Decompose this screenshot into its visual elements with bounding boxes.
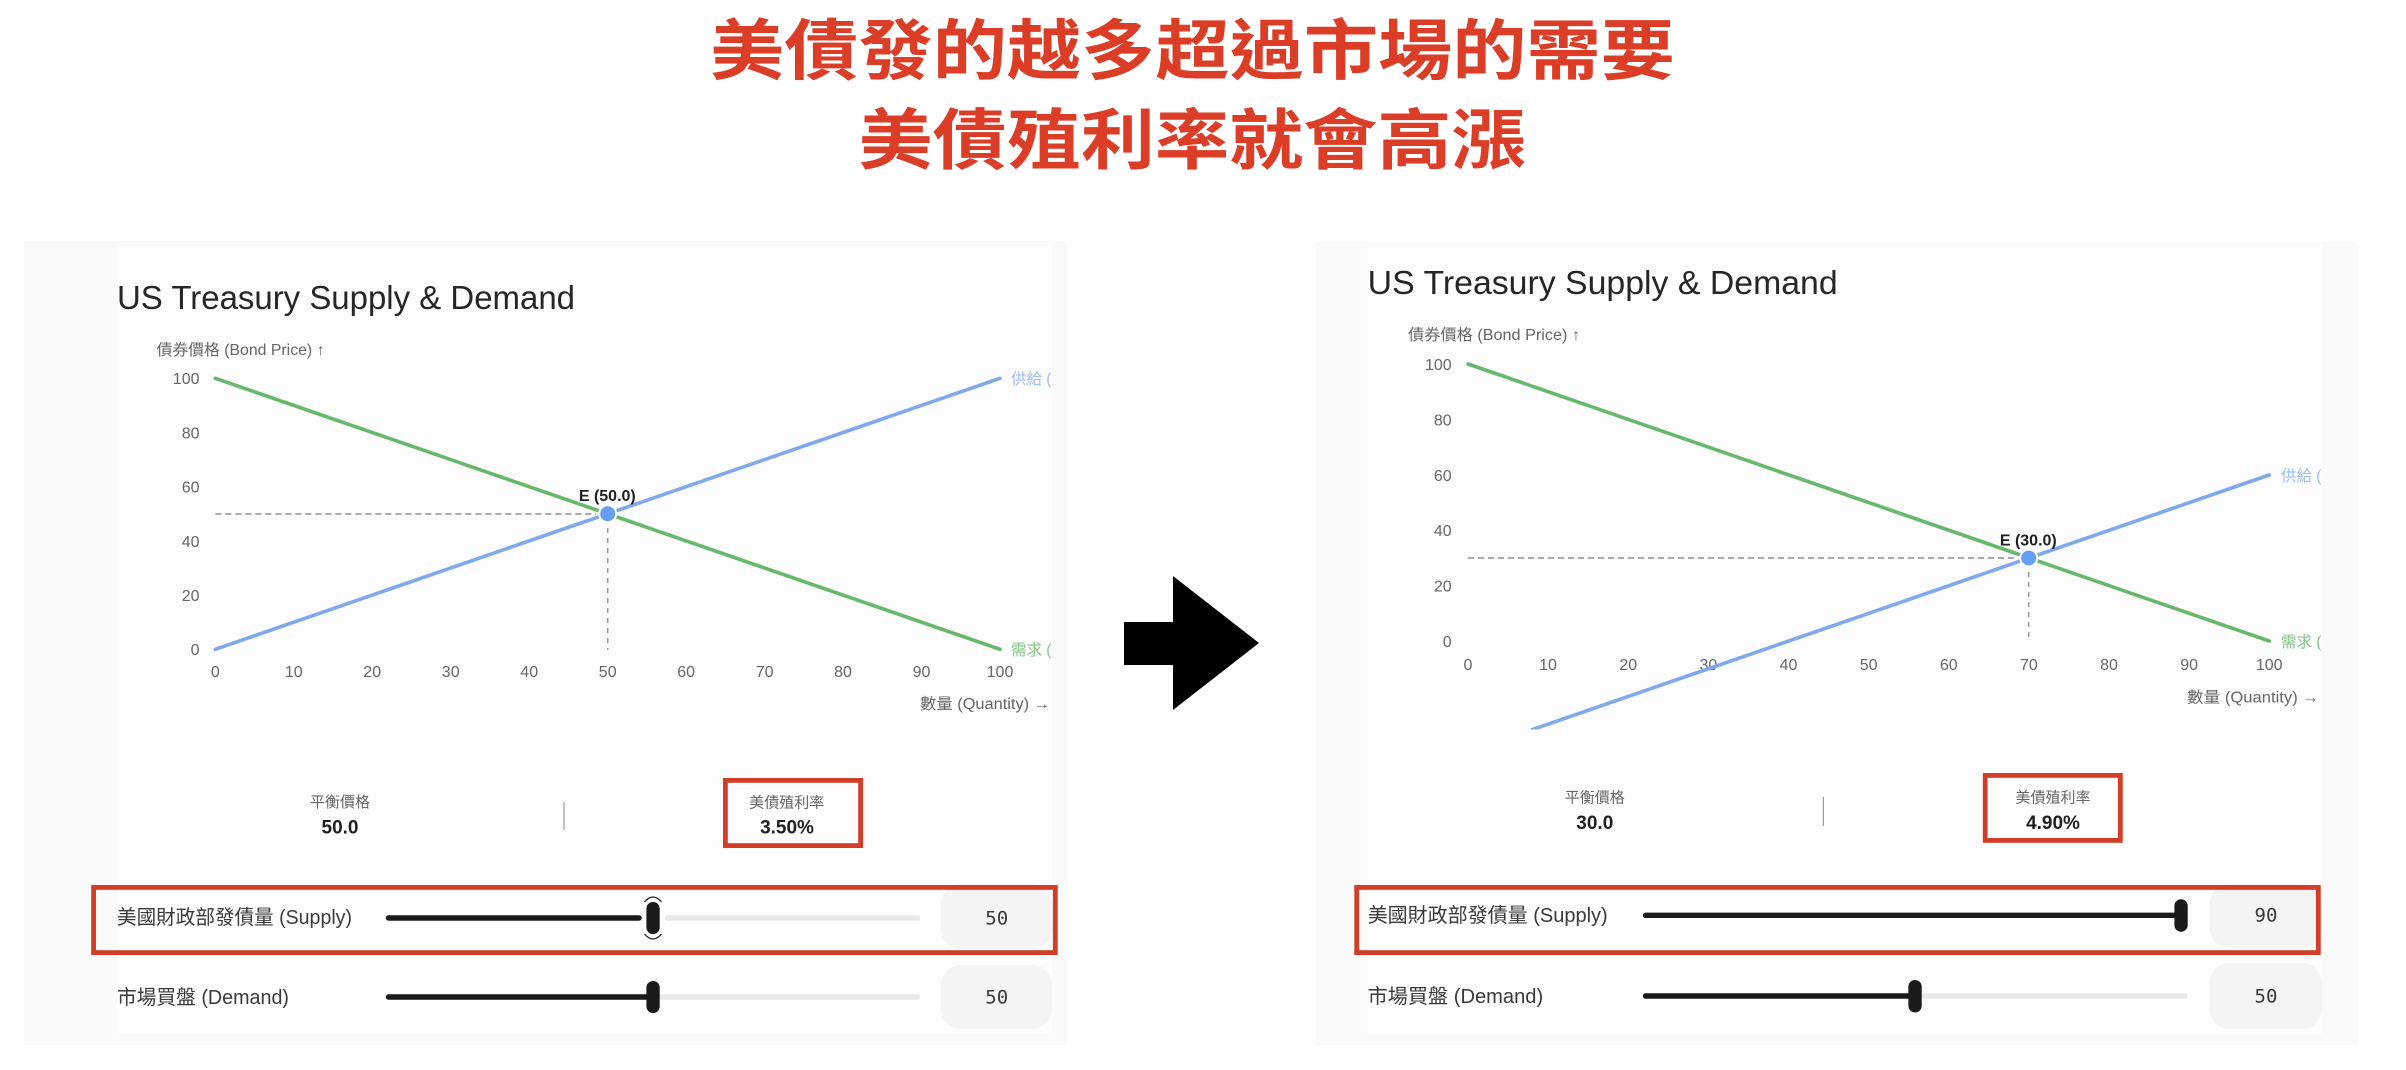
x axis ticks: 40 <box>520 664 538 681</box>
demand track <box>386 994 920 1000</box>
slider: supply <box>1368 884 2322 948</box>
chart heading: US Treasury Supply & Demand <box>117 279 575 316</box>
stat: equilibrium price: 50.0 <box>322 818 358 838</box>
arrow <box>1124 576 1259 710</box>
y axis ticks <box>1425 357 1452 651</box>
x axis ticks: 40 <box>1780 657 1798 674</box>
supply label: 美國財政部發債量 (Supply) <box>1368 904 1608 927</box>
demand track <box>1643 993 2187 999</box>
demand label: 市場買盤 (Demand) <box>1368 985 1543 1008</box>
x axis ticks: 0 <box>1464 657 1473 674</box>
demand value: 50 <box>2255 986 2277 1008</box>
x axis ticks <box>1464 659 2282 670</box>
supply line label: 供給 (Supply) <box>1011 370 1104 388</box>
demand line label: 需求 (Demand) <box>2281 633 2385 651</box>
x axis ticks: 70 <box>2020 657 2038 674</box>
stat: equilibrium price: 30.0 <box>1576 813 1613 834</box>
chart heading: US Treasury Supply & Demand <box>1368 264 1838 301</box>
y axis ticks: 100 <box>1425 357 1452 374</box>
supply value: 90 <box>2255 904 2277 926</box>
equilibrium point <box>2020 550 2037 566</box>
panel: after, supply raised to 90 <box>1354 270 2322 1029</box>
title: 美債殖利率就會高漲 <box>858 104 1526 178</box>
x axis ticks: 70 <box>756 664 774 681</box>
supply track <box>386 915 920 921</box>
stat: equilibrium price <box>310 794 370 838</box>
x axis ticks: 20 <box>1619 657 1637 674</box>
supply track <box>1643 913 2183 918</box>
demand line label: 需求 (Demand) <box>1011 641 1115 659</box>
y axis ticks: 80 <box>182 426 200 442</box>
supply line label: 供給 (Supply) <box>2281 467 2374 485</box>
y axis ticks: 60 <box>1434 468 1452 485</box>
slider: supply <box>117 884 1052 949</box>
y axis ticks: 60 <box>182 480 200 496</box>
supply value: 50 <box>985 908 1008 930</box>
demand value box <box>941 965 1052 1029</box>
stat: treasury yield <box>2015 790 2091 834</box>
demand thumb <box>646 981 660 1013</box>
stat: treasury yield: 美債殖利率 <box>749 794 824 812</box>
x axis ticks: 0 <box>211 664 220 681</box>
equilibrium guides <box>1468 558 2029 641</box>
demand line <box>215 378 1000 649</box>
y axis ticks: 0 <box>191 642 200 659</box>
x axis ticks: 50 <box>599 664 617 681</box>
demand value box <box>2210 963 2322 1029</box>
red highlight: yield <box>725 780 861 846</box>
y axis ticks: 80 <box>1434 413 1452 430</box>
x axis ticks: 60 <box>677 664 695 681</box>
stat: treasury yield: 美債殖利率 <box>2015 790 2091 806</box>
slider: demand <box>117 965 1052 1029</box>
demand value: 50 <box>985 986 1008 1008</box>
x axis ticks: 20 <box>363 664 381 681</box>
supply value box <box>941 884 1052 949</box>
supply label: 美國財政部發債量 (Supply) <box>117 906 352 929</box>
red highlight: supply row <box>94 887 1055 953</box>
title: 美債發的越多超過市場的需要 <box>710 14 1675 88</box>
y axis ticks: 100 <box>173 371 200 388</box>
stat: treasury yield: 3.50% <box>760 818 814 838</box>
supply value box <box>2210 884 2322 948</box>
x axis ticks: 80 <box>2100 657 2118 674</box>
stat: treasury yield <box>749 794 824 838</box>
demand line <box>1468 364 2269 641</box>
x axis ticks: 10 <box>1539 657 1557 674</box>
x axis label: 數量 (Quantity) → <box>2187 688 2319 706</box>
stat: equilibrium price: 平衡價格 <box>310 794 370 811</box>
x axis ticks: 100 <box>987 664 1013 681</box>
supply thumb <box>2174 899 2188 932</box>
stat: equilibrium price: 平衡價格 <box>1565 790 1625 806</box>
x axis ticks: 100 <box>2256 657 2283 674</box>
x axis ticks: 60 <box>1940 657 1958 674</box>
x axis label: 數量 (Quantity) → <box>920 695 1050 713</box>
y axis ticks: 20 <box>182 588 200 605</box>
y axis ticks: 40 <box>182 534 200 551</box>
slider: demand <box>1368 963 2322 1029</box>
y axis ticks: 0 <box>1443 634 1452 651</box>
x axis ticks <box>212 666 1013 677</box>
stats divider <box>1822 797 1824 826</box>
y axis ticks <box>173 371 200 659</box>
equilibrium label: E (50.0) <box>579 488 636 505</box>
y axis label: 債券價格 (Bond Price) ↑ <box>156 341 324 359</box>
red highlight: yield <box>1985 775 2120 840</box>
panel background <box>24 241 1067 1045</box>
x axis ticks: 30 <box>1700 657 1717 674</box>
panel: before, baseline supply 50 <box>91 285 1058 1029</box>
panel background <box>1316 242 2358 1045</box>
stat: treasury yield: 4.90% <box>2026 813 2080 834</box>
equilibrium point <box>599 505 616 522</box>
equilibrium label: E (30.0) <box>2000 532 2057 550</box>
title <box>710 14 1675 178</box>
supply line <box>215 378 1000 649</box>
x axis ticks: 50 <box>1860 657 1878 674</box>
y axis label: 債券價格 (Bond Price) ↑ <box>1408 326 1580 344</box>
equilibrium guides <box>215 514 608 650</box>
x axis ticks: 90 <box>913 664 930 681</box>
supply line <box>1532 475 2269 730</box>
supply and demand chart <box>1408 326 2385 730</box>
demand label: 市場買盤 (Demand) <box>117 986 289 1009</box>
demand thumb <box>1908 980 1922 1012</box>
supply and demand chart <box>156 341 1115 713</box>
y axis ticks: 40 <box>1434 523 1452 540</box>
x axis ticks: 10 <box>285 664 303 681</box>
x axis ticks: 30 <box>442 664 460 681</box>
stat: equilibrium price <box>1565 790 1625 834</box>
supply thumb <box>644 897 662 939</box>
y axis ticks: 20 <box>1434 579 1452 596</box>
red highlight: supply row <box>1357 887 2318 953</box>
stats divider <box>563 802 565 830</box>
x axis ticks: 80 <box>834 664 852 681</box>
x axis ticks: 90 <box>2180 657 2198 674</box>
